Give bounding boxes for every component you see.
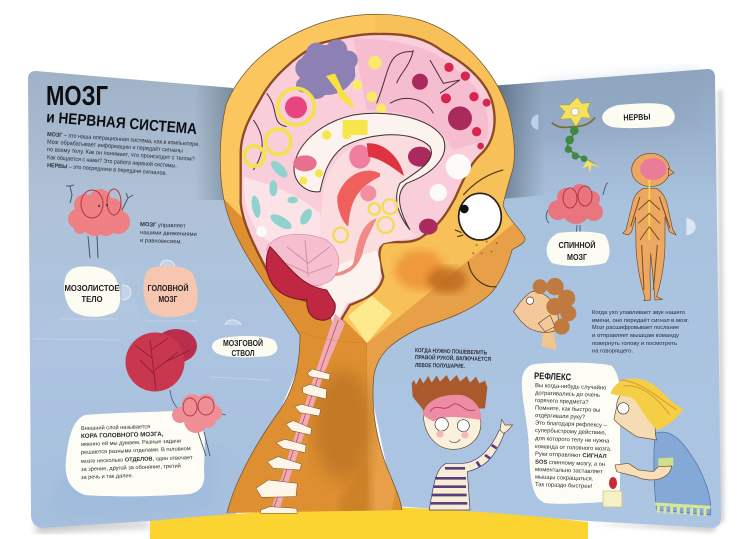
intro text block: по всему телу. Как он понимает, что происходит с телом? [47,147,196,163]
text card: reflex: Помните, как быстро вы [535,406,600,414]
text: how the ear works: имени, оно передаёт сигнал в мозг. [592,318,689,324]
label: nerves: НЕРВЫ [623,112,651,122]
intro text block [47,132,200,177]
small gears [333,199,397,242]
mascot: brain with glasses [66,185,133,258]
text: how the ear works: Мозг расшифровывает послание [592,325,680,331]
label: brain: ГОЛОВНОЙ [148,282,188,293]
label: brain stem [212,336,277,358]
illustration: boy listening [513,278,576,350]
label: corpus callosum: МОЗОЛИСТОЕ [64,283,120,293]
brain cross-section [241,34,495,330]
text card: reflex: горячего предмета? [535,398,589,406]
small brain [293,155,317,171]
magenta brains [383,74,472,235]
nervous system figure [623,153,695,301]
caption: brain controls movement: нашими движениями [140,230,197,238]
caption: left hemisphere: ПРАВОЙ РУКОЙ, ВКЛЮЧАЕТСЯ [415,353,491,363]
label: corpus callosum: ТЕЛО [82,294,103,304]
face lower fold [367,224,525,510]
text card: reflex: SOS спинному мозгу, а он [535,460,605,468]
illustration: girl with hand near candle [611,378,711,516]
title [46,80,198,138]
cerebellum [267,234,339,286]
dark red lobe [266,247,335,320]
white patch lower brain [317,250,381,330]
text card: reflex: дотрагивались до очень [535,391,600,399]
spine and vertebrae [256,313,368,513]
text card: reflex: РЕФЛЕКС [534,371,571,383]
title: МОЗГ [46,80,108,111]
text: how the ear works [592,310,689,354]
text card: reflex: команда от головного мозга. [535,444,612,453]
text card: cerebral cortex: мозге несколько ОТДЕЛОВ, один отвечает [81,455,193,465]
text card: cerebral cortex [66,410,205,496]
intro text block: Мозг обрабатывает информацию и передаёт сигналы [47,140,183,155]
nerve lines [253,50,460,170]
illustration: red leaf balloon [126,329,197,410]
text card: cerebral cortex: решаются разными отделами. В головном [81,446,191,456]
text: how the ear works: и отправляет мышцам команду [592,333,679,339]
pale interior under arc [320,135,430,273]
text card: reflex: для которого телу не нужна [535,436,610,445]
mascot: brain holding balloon [172,394,226,456]
caption: brain controls movement: МОЗГ управляет [140,222,186,230]
text: how the ear works: на говорящего. [592,348,633,354]
yellow sign [343,120,368,135]
upper head fold [220,14,514,343]
panel: right page [360,69,724,532]
corpus callosum arc [294,113,445,230]
tab [687,218,695,235]
text: how the ear works: Когда ухо улавливает звук нашего [592,310,686,316]
text card: cerebral cortex: именно ей мы думаем. Разные задачи [81,438,181,448]
tab [531,115,538,129]
gears [244,88,314,166]
label: brain stem: МОЗГОВОЙ [223,337,263,348]
caption: left hemisphere: ЛЕВОЕ ПОЛУШАРИЕ. [415,363,465,370]
caption: brain controls movement: и равновесием. [140,238,182,245]
teal drops [250,158,314,232]
label: spinal cord: МОЗГ [567,252,587,262]
eye and facial features [455,170,503,287]
caption: brain controls movement [140,222,197,245]
text card: reflex [522,363,620,504]
bulbs [352,56,386,113]
text card: cerebral cortex: Внешний слой называется [81,423,150,432]
text: how the ear works: повернуть голову и посмотреть [592,341,677,347]
mascot: brain near spinal cord label [546,183,608,238]
hearts [441,63,491,149]
text card: reflex: мышцы сокращаться. [535,475,594,483]
text card: reflex: Это благодаря рефлексу – [535,421,608,429]
intro text block: НЕРВЫ – это посредники в передаче сигналов. [47,163,167,177]
caption: left hemisphere: КОГДА НУЖНО ПОШЕВЕЛИТЬ [415,348,487,357]
illustration: candle [603,477,622,507]
text card: reflex: Вы когда-нибудь случайно [535,382,606,391]
limbic parts [349,145,371,169]
soft pink patch [353,38,488,150]
label: brain [143,266,198,317]
label: nerves [602,103,675,128]
text card: reflex: отдёргивали руку? [535,413,586,421]
yellow base strip [150,507,588,539]
text card: reflex: моментально заставляет [535,467,603,475]
panel: left page [28,71,310,533]
intro text block: Как общается с нами? Это работа нервной системы. [47,154,177,170]
text card: cerebral cortex: КОРА ГОЛОВНОГО МОЗГА, [81,431,164,440]
label: spinal cord: СПИННОЙ [558,239,596,250]
head and neck [220,14,526,514]
label: corpus callosum [64,266,120,317]
text card: cerebral cortex: за речь и так далее. [81,473,134,481]
title: и НЕРВНАЯ СИСТЕМА [46,109,198,138]
text card: reflex: Так гораздо быстрее! [535,482,593,490]
caption: left hemisphere [415,348,491,370]
label: spinal cord [547,232,610,266]
label: brain stem: СТВОЛ [232,348,254,358]
lightning [326,73,355,109]
text card: cerebral cortex: за зрение, другой за обоняние, третий [81,463,181,473]
pale lower-left patch [243,177,327,243]
white highlights [256,154,471,237]
purple cloud [295,39,358,99]
text card: reflex: супербыстрому действию, [535,427,607,436]
label: brain: МОЗГ [158,294,178,304]
text card: reflex: Руки отправляют СИГНАЛ [535,452,607,460]
intro text block: МОЗГ – это наша операционная система, как в компьютере. [47,132,200,148]
neuron illustration [531,97,600,173]
illustration: boy with brain waving [412,375,513,510]
